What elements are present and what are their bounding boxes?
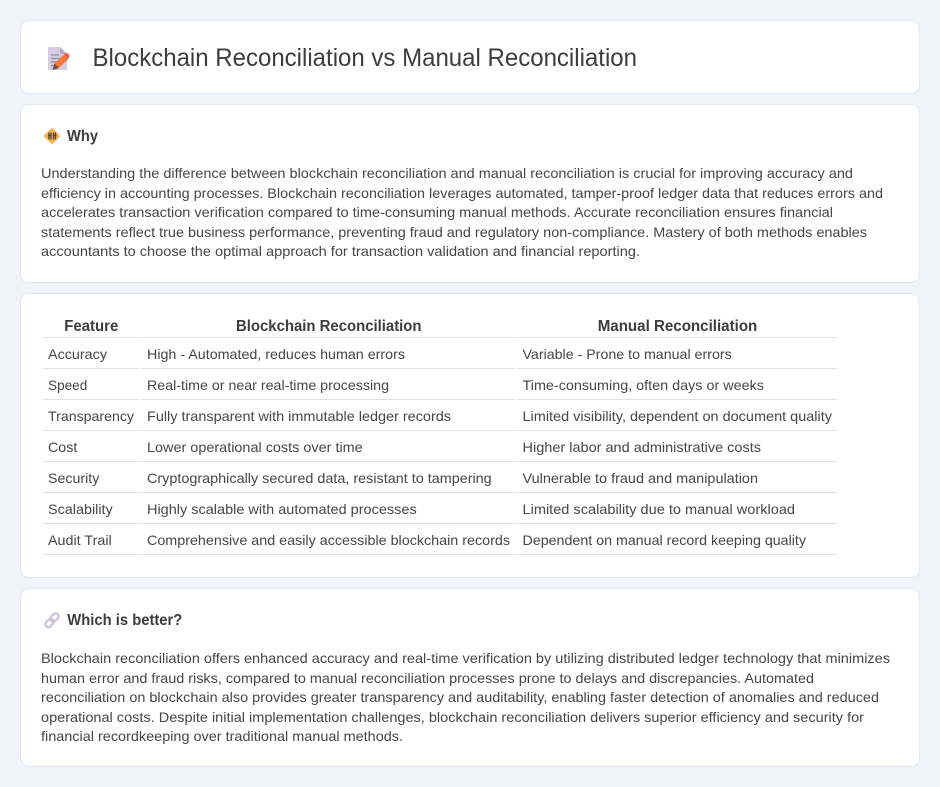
panel: why xyxy=(20,104,920,282)
text block: which is better paragraph: Blockchain reconciliation offers enhanced accuracy and real-time verification by utilizing distributed ledger technology that minimizes xyxy=(41,650,890,666)
text block: which is better paragraph: human error and fraud risks, compared to manual reconciliation processes prone to delays and discrepancies. Automated xyxy=(41,670,814,686)
table row: speed xyxy=(43,377,837,400)
text block: which is better paragraph xyxy=(41,650,890,744)
icon: warning diamond xyxy=(44,128,60,144)
table row: scalability: Scalability xyxy=(48,501,113,517)
heading: why: Why xyxy=(67,128,98,145)
table row: speed: Real-time or near real-time processing xyxy=(147,377,389,393)
table row: cost xyxy=(43,439,837,462)
text block: why paragraph: Understanding the difference between blockchain reconciliation and manual reconciliation is crucial for improving accuracy and xyxy=(41,165,853,181)
table row: scalability: Limited scalability due to manual workload xyxy=(522,501,795,517)
table row: audit trail xyxy=(43,532,837,555)
table row: scalability: Highly scalable with automated processes xyxy=(147,501,417,517)
panel: which is better xyxy=(20,588,920,766)
table header row: Manual Reconciliation xyxy=(598,318,757,335)
text block: why paragraph: accelerates transaction verification compared to time-consuming manual methods. Accurate reconciliation ensures financial xyxy=(41,204,833,220)
table row: transparency xyxy=(43,408,837,431)
text block: which is better paragraph: financial recordkeeping over traditional manual methods. xyxy=(41,728,403,744)
text block: which is better paragraph: reconciliation on blockchain also provides greater transparency and auditability, enabling faster detection of anomalies and reduced xyxy=(41,689,879,705)
table row: transparency: Transparency xyxy=(48,408,134,424)
table row: cost: Lower operational costs over time xyxy=(147,439,363,455)
table row: security: Cryptographically secured data, resistant to tampering xyxy=(147,470,492,486)
table header row: Feature xyxy=(64,318,118,335)
table row: cost: Cost xyxy=(48,439,77,455)
text block: why paragraph: statements reflect true business performance, preventing fraud and regulatory non-compliance. Mastery of both methods enables xyxy=(41,224,867,240)
text block: why paragraph: efficiency in accounting processes. Blockchain reconciliation leverages automated, tamper-proof ledger data that reduces errors and xyxy=(41,185,883,201)
panel: comparison table xyxy=(20,294,920,578)
table row: accuracy: High - Automated, reduces human errors xyxy=(147,346,405,362)
table row: accuracy: Variable - Prone to manual errors xyxy=(522,346,732,362)
table row: audit trail: Comprehensive and easily accessible blockchain records xyxy=(147,532,510,548)
table row: security xyxy=(43,470,837,493)
table header row xyxy=(43,318,837,338)
table row: security: Vulnerable to fraud and manipulation xyxy=(522,470,758,486)
text block: why paragraph: accountants to choose the optimal approach for transaction validation and financial reporting. xyxy=(41,243,640,259)
table row: accuracy xyxy=(43,346,837,369)
icon: document with pencil xyxy=(48,47,70,70)
table row: audit trail: Dependent on manual record keeping quality xyxy=(522,532,806,548)
table row: cost: Higher labor and administrative costs xyxy=(522,439,761,455)
table row: audit trail: Audit Trail xyxy=(48,532,112,548)
icon: chain link xyxy=(44,612,60,628)
panel: title header xyxy=(20,20,920,94)
table row: speed: Time-consuming, often days or weeks xyxy=(522,377,764,393)
table row: transparency: Limited visibility, dependent on document quality xyxy=(522,408,832,424)
table row: scalability xyxy=(43,501,837,524)
heading: which is better: Which is better? xyxy=(67,612,182,629)
text block: which is better paragraph: operational costs. Despite initial implementation challenges, blockchain reconciliation delivers superior efficiency and security for xyxy=(41,709,864,725)
table row: accuracy: Accuracy xyxy=(48,346,107,362)
text block: why paragraph xyxy=(41,165,883,259)
table row: security: Security xyxy=(48,470,99,486)
table header row: Blockchain Reconciliation xyxy=(236,318,422,335)
table row: speed: Speed xyxy=(48,377,87,393)
table row: transparency: Fully transparent with immutable ledger records xyxy=(147,408,451,424)
title: Blockchain Reconciliation vs Manual Reconciliation xyxy=(92,44,637,72)
